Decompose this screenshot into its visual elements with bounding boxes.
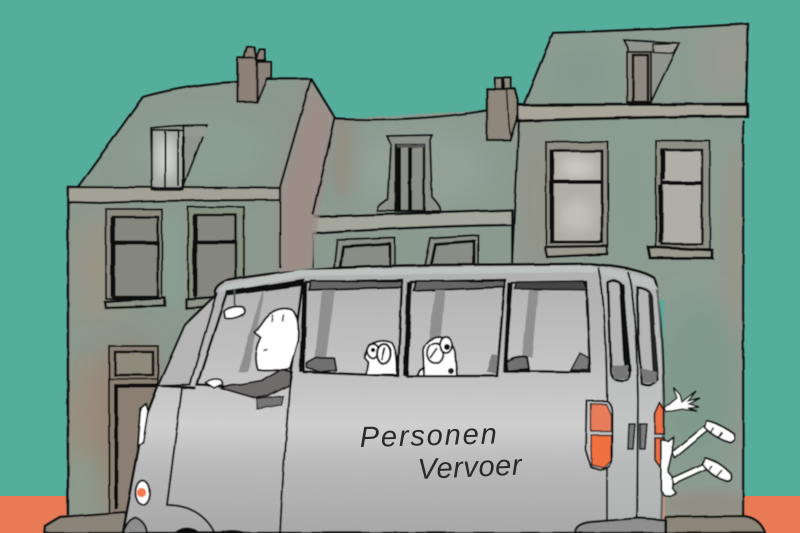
window: second: [301, 280, 402, 376]
rear doors: [598, 267, 664, 533]
cab door outline: [158, 370, 291, 533]
chimney: [487, 78, 518, 140]
dormer window: [377, 135, 441, 211]
upper leg and shoe: [672, 421, 734, 458]
side lettering: [359, 418, 524, 486]
lower window right: [424, 235, 478, 268]
chimney: [238, 47, 271, 102]
window 2: [648, 141, 712, 258]
passenger falling out the back: [661, 388, 734, 496]
front indicator: [136, 481, 150, 505]
side lamp: [138, 404, 148, 446]
window: third: [405, 280, 505, 376]
window 2: [186, 207, 244, 308]
house: left: [45, 47, 335, 533]
passenger van: [123, 264, 665, 533]
door handles: [628, 424, 647, 449]
house: middle: [312, 108, 519, 270]
dormer window: [624, 40, 679, 102]
tail light left: [586, 401, 612, 470]
door: [109, 346, 158, 516]
waving hand: [665, 388, 700, 412]
bumper rear: [575, 518, 665, 533]
text: Vervoer: Vervoer: [417, 449, 524, 486]
van body: [123, 264, 664, 533]
rear view mirror: [224, 306, 244, 319]
driver arm: [221, 369, 292, 398]
house: right: [487, 20, 765, 533]
lower leg and shoe: [672, 458, 732, 484]
body: [661, 437, 676, 496]
cornice band: [309, 210, 512, 234]
window 1: [105, 209, 165, 308]
ground band: [0, 496, 800, 533]
lower window left: [334, 238, 395, 268]
cornice band: [68, 187, 280, 203]
cornice band: [517, 104, 747, 121]
text: Personen: Personen: [359, 418, 497, 454]
window: fourth: [487, 281, 590, 374]
roof highlight: [218, 265, 658, 292]
wheel arch: [123, 518, 147, 533]
tail light right: [655, 403, 664, 467]
driver: [206, 309, 298, 409]
dormer window: [151, 125, 207, 191]
passenger one: [364, 341, 397, 375]
cab window: [158, 280, 303, 388]
passenger two: [418, 337, 457, 376]
door step: [45, 512, 135, 533]
pavement step: [665, 516, 765, 533]
window 1: [545, 142, 608, 257]
